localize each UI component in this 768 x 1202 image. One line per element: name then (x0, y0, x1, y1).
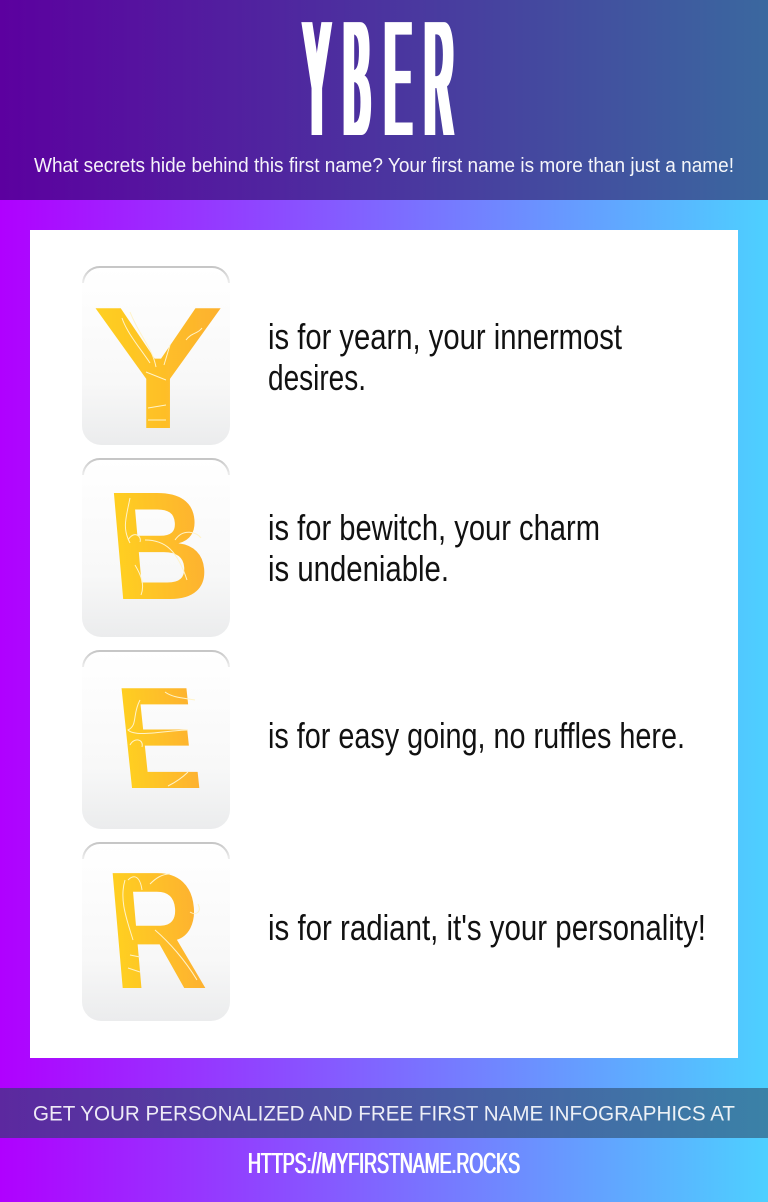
icon: letter R: R (101, 838, 211, 1024)
header band (0, 0, 768, 200)
footer band (0, 1088, 768, 1138)
footer url: HTTPS://MYFIRSTNAME.ROCKS (248, 1148, 520, 1180)
panel: letters (30, 230, 738, 1058)
text: B meaning (268, 507, 600, 589)
icon: letter Y: Y (89, 270, 227, 465)
text: Y meaning: desires. (268, 357, 366, 398)
icon: letter B: B (102, 459, 216, 632)
footer call to action: GET YOUR PERSONALIZED AND FREE FIRST NAME INFOGRAPHICS AT (33, 1102, 735, 1126)
text: B meaning: is undeniable. (268, 548, 449, 589)
text: Y meaning (268, 316, 622, 398)
text: Y meaning: is for yearn, your innermost (268, 316, 622, 357)
text: B meaning: is for bewitch, your charm (268, 507, 600, 548)
subtitle: What secrets hide behind this first name? Your first name is more than just a name! (34, 155, 734, 177)
icon: letter E: E (110, 656, 207, 819)
